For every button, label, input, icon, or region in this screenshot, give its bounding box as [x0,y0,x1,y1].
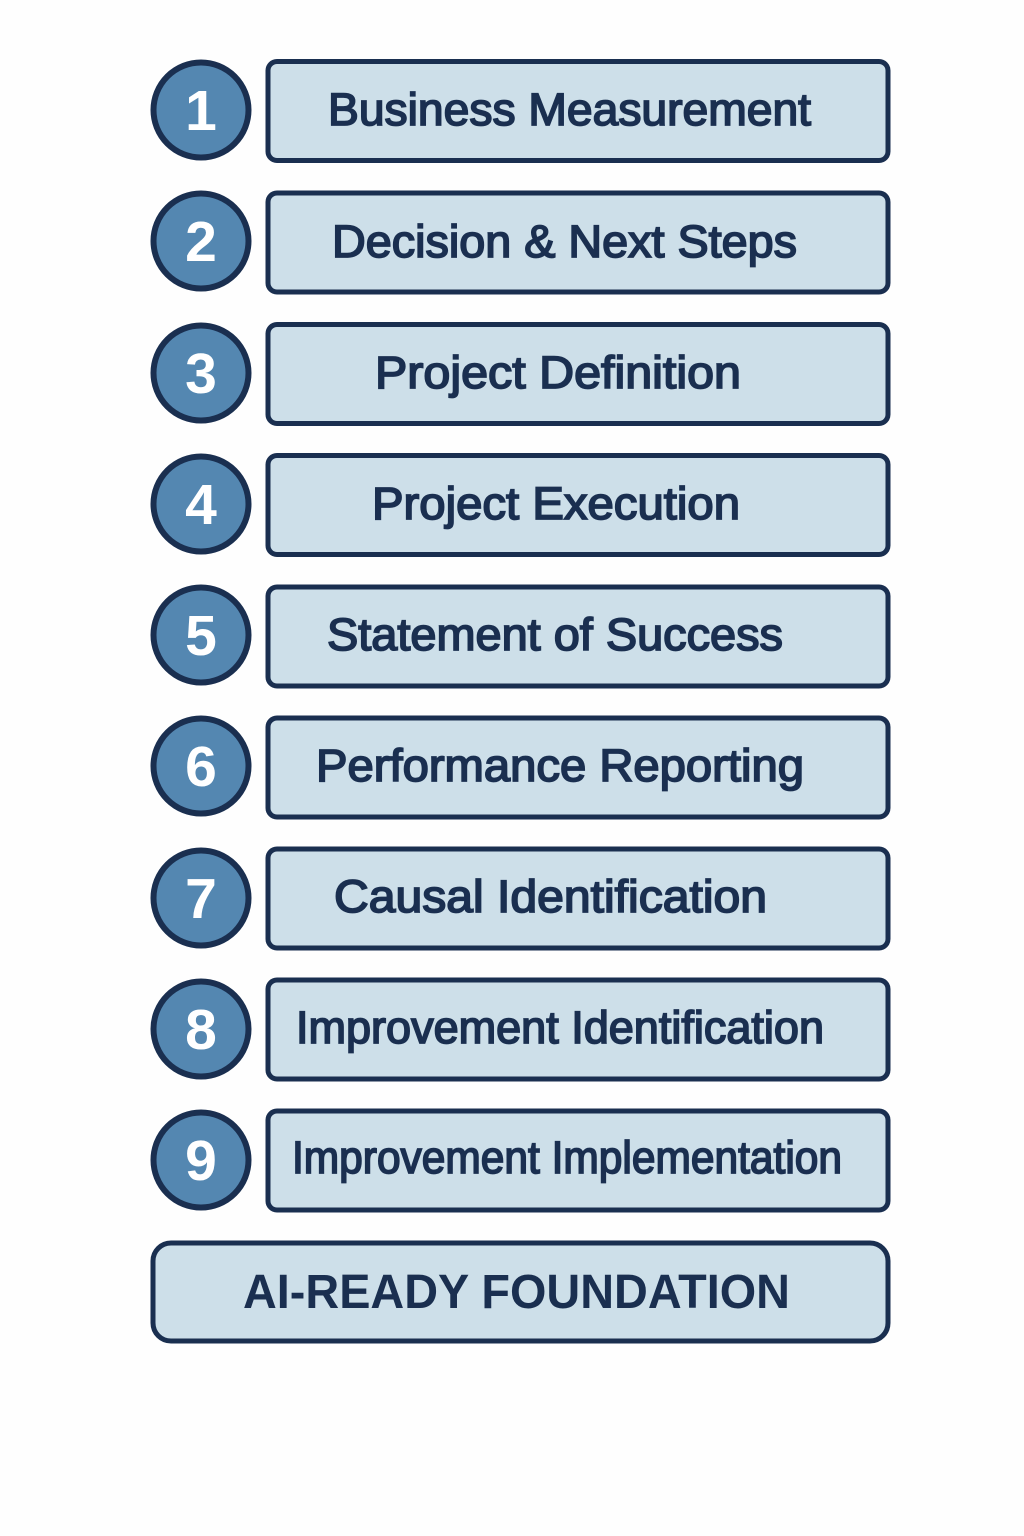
number badge 3: 3 [185,342,217,406]
label box 5: Statement of Success [327,609,783,660]
label box 1 [268,62,888,160]
foundation label: AI-READY FOUNDATION [243,1266,790,1319]
label box 3 [268,324,888,424]
number badge 1: 1 [185,79,217,143]
foundation bar [153,1243,888,1341]
number badge 1 [154,62,248,158]
step 5: Statement of Success [154,587,888,686]
number badge 3 [154,326,248,420]
label box 1: Business Measurement [328,84,812,135]
number badge 6: 6 [185,735,217,799]
step 3: Project Definition [154,324,888,424]
label box 6: Performance Reporting [316,740,804,791]
step 2: Decision & Next Steps [154,193,888,292]
step 6: Performance Reporting [154,718,888,817]
label box 2 [268,193,888,292]
number badge 4: 4 [185,473,217,537]
label box 5 [268,587,888,686]
label box 4 [268,456,888,554]
number badge 5 [154,588,248,682]
label box 8: Improvement Identification [296,1002,824,1053]
label box 7 [268,849,888,948]
step 9: Improvement Implementation [154,1111,888,1210]
number badge 7 [154,850,248,946]
number badge 7: 7 [185,867,217,931]
step 7: Causal Identification [154,849,888,948]
step 1: Business Measurement [154,62,888,160]
step 4: Project Execution [154,456,888,554]
number badge 8 [154,982,248,1076]
number badge 9 [154,1112,248,1208]
number badge 4 [154,456,248,552]
label box 9: Improvement Implementation [292,1132,842,1183]
label box 3: Project Definition [375,347,741,398]
label box 4: Project Execution [372,478,740,529]
step 8: Improvement Identification [154,980,888,1079]
number badge 5: 5 [185,604,217,668]
number badge 9: 9 [185,1129,217,1193]
label box 9 [268,1111,888,1210]
label box 7: Causal Identification [334,871,767,922]
label box 2: Decision & Next Steps [332,216,797,267]
number badge 8: 8 [185,998,217,1062]
label box 8 [268,980,888,1079]
label box 6 [268,718,888,817]
number badge 6 [154,718,248,814]
number badge 2 [154,194,248,288]
number badge 2: 2 [185,210,217,274]
